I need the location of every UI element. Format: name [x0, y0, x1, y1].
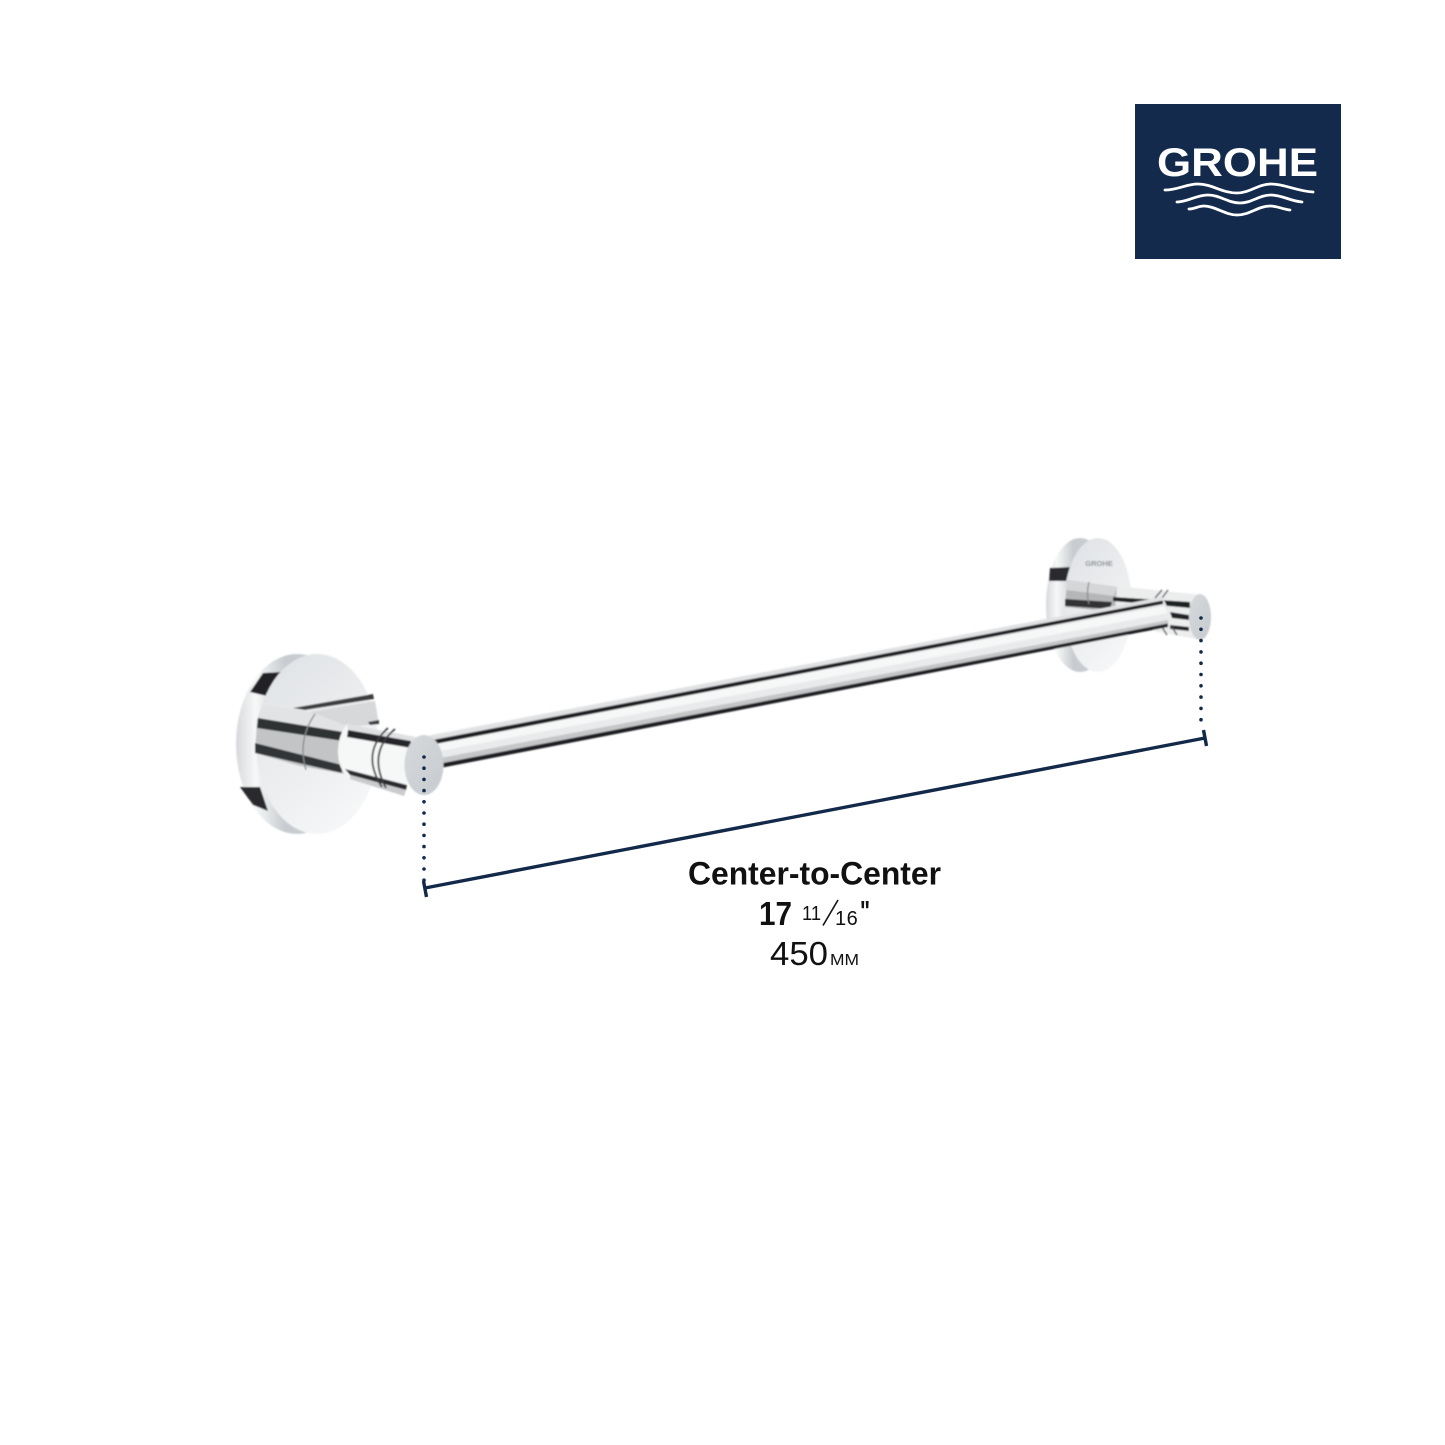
imperial dimension [759, 895, 870, 932]
imperial dimension: 17 [759, 895, 792, 932]
dimension line with end ticks [424, 730, 1206, 897]
logo waves [1165, 184, 1313, 215]
product: chrome towel bar [236, 538, 1211, 834]
right post [1065, 580, 1203, 639]
right dotted extension line [1199, 618, 1203, 722]
right end cap [1189, 594, 1211, 640]
imperial dimension: 16 [835, 908, 858, 930]
metric dimension: 450 [770, 936, 828, 973]
imperial dimension: " [860, 896, 870, 928]
imperial dimension: 11 [802, 903, 821, 925]
metric dimension [770, 936, 859, 973]
left wall plate [236, 654, 379, 834]
logo wordmark: GROHE [1157, 141, 1318, 185]
plate logo: GROHE [1085, 559, 1113, 568]
measurement label [688, 856, 941, 973]
heading: Center-to-Center: Center-to-Center [688, 856, 941, 892]
left dotted extension line [422, 757, 426, 882]
right wall plate [1046, 538, 1132, 672]
left end cap [404, 735, 444, 795]
horizontal bar [430, 597, 1169, 770]
left post [255, 705, 416, 796]
logo: GROHE badge [1135, 104, 1341, 259]
metric dimension: MM [830, 952, 859, 969]
